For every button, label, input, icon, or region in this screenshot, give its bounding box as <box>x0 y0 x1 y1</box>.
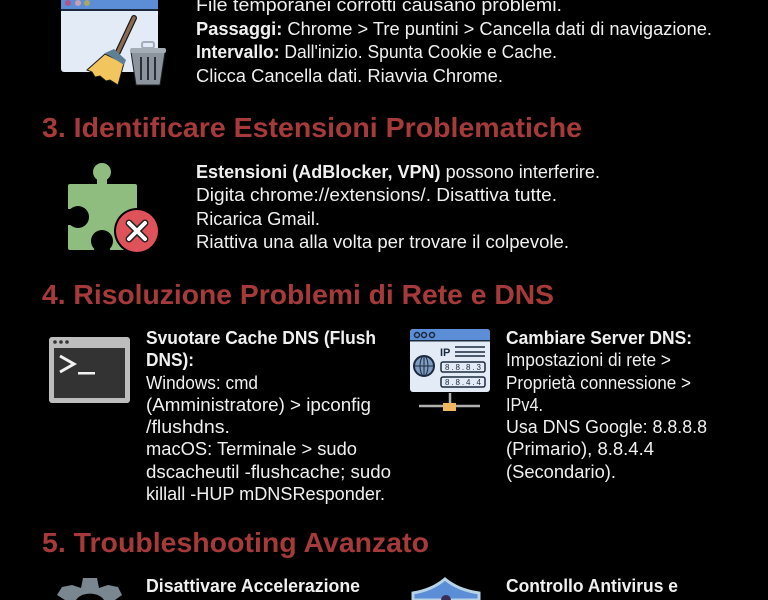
section 2 text: Clicca Cancella dati. Riavvia Chrome. <box>196 66 503 86</box>
section 3 text <box>196 162 600 252</box>
icon: shield <box>413 579 479 600</box>
heading: section 5: 5. Troubleshooting Avanzato <box>42 527 429 558</box>
icon: terminal window <box>49 337 130 403</box>
column: flush DNS text: DNS): <box>146 350 194 370</box>
section 2 text: Passaggi: Chrome > Tre puntini > Cancella dati di navigazione. <box>196 19 712 39</box>
icon: browser window with broom and trash <box>61 0 166 85</box>
section 2 text <box>196 0 712 86</box>
column: change DNS text: IPv4. <box>506 395 543 415</box>
column: change DNS text: Proprietà connessione > <box>506 373 691 393</box>
column: flush DNS text: Svuotare Cache DNS (Flush <box>146 328 376 348</box>
icon: DNS server settings: IP <box>440 347 450 359</box>
column: change DNS text: (Primario), 8.8.4.4 <box>506 439 654 459</box>
icon: puzzle piece with red X <box>66 163 160 254</box>
section 3 text: Riattiva una alla volta per trovare il colpevole. <box>196 232 569 252</box>
column: flush DNS text: (Amministratore) > ipconfig <box>146 395 371 415</box>
column: flush DNS text <box>146 328 391 504</box>
heading: section 4: 4. Risoluzione Problemi di Rete e DNS <box>42 279 554 310</box>
column: hardware acceleration text: Disattivare Accelerazione <box>146 576 360 596</box>
section 3 text: Digita chrome://extensions/. Disattiva tutte. <box>196 185 557 205</box>
icon: DNS server settings: 8.8.4.4 <box>445 378 482 387</box>
section 3 text: Estensioni (AdBlocker, VPN) possono interferire. <box>196 162 600 182</box>
icon: DNS server settings <box>410 329 490 411</box>
column: change DNS text: Impostazioni di rete > <box>506 350 671 370</box>
column: flush DNS text: killall -HUP mDNSResponder. <box>146 484 385 504</box>
column: change DNS text: (Secondario). <box>506 462 616 482</box>
column: flush DNS text: dscacheutil -flushcache; sudo <box>146 462 391 482</box>
column: change DNS text: Usa DNS Google: 8.8.8.8 <box>506 417 707 437</box>
column: change DNS text <box>506 328 707 482</box>
column: flush DNS text: macOS: Terminale > sudo <box>146 439 357 459</box>
heading: section 3: 3. Identificare Estensioni Problematiche <box>42 112 582 143</box>
column: flush DNS text: /flushdns. <box>146 417 230 437</box>
section 2 text: Intervallo: Dall'inizio. Spunta Cookie e Cache. <box>196 42 557 62</box>
column: change DNS text: Cambiare Server DNS: <box>506 328 692 348</box>
icon: DNS server settings: 8.8.8.3 <box>445 363 482 372</box>
column: antivirus text: Controllo Antivirus e <box>506 576 678 596</box>
column: flush DNS text: Windows: cmd <box>146 373 258 393</box>
section 3 text: Ricarica Gmail. <box>196 209 320 229</box>
icon: gear <box>57 578 122 600</box>
